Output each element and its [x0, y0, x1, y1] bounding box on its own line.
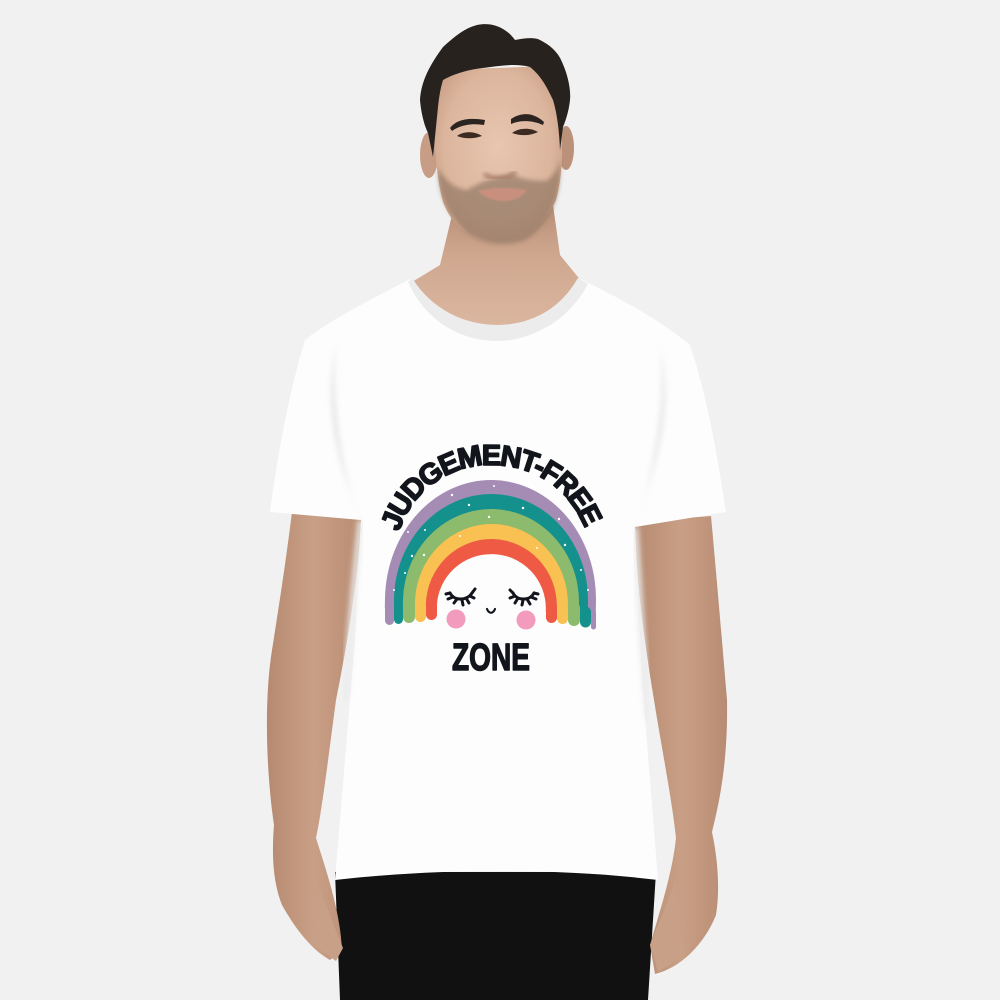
neck: [412, 205, 582, 330]
right ear: [558, 126, 574, 170]
red band: [426, 538, 558, 612]
face: [434, 66, 562, 244]
nose: [484, 172, 516, 178]
face on rainbow: [446, 589, 538, 630]
sparkle dots: [393, 485, 589, 591]
heading: zone: ZONE: [452, 637, 530, 679]
inner dome: [436, 553, 547, 633]
right cheek: [516, 610, 536, 630]
scalloped feet: [390, 606, 594, 627]
green band: [403, 507, 581, 612]
right closed eye: [510, 590, 538, 605]
trousers: [335, 872, 656, 1000]
eyebrows: [450, 114, 544, 131]
left ear: [420, 132, 438, 178]
purple band: [385, 478, 599, 612]
left closed eye: [446, 589, 475, 605]
collar: [408, 278, 588, 341]
mouth: [478, 188, 527, 201]
rainbow: [384, 478, 599, 634]
head: [420, 24, 574, 244]
yellow band: [415, 522, 570, 612]
t-shirt: [270, 278, 726, 880]
left arm and hand: [267, 512, 361, 961]
smile: [487, 609, 495, 613]
beard: [438, 160, 560, 244]
eyes: [457, 129, 538, 138]
right arm and hand: [635, 516, 727, 974]
curved heading: JUDGEMENT-FREE: [382, 444, 604, 530]
hair: [420, 24, 570, 157]
sleeve shading: [332, 345, 665, 525]
teal band: [394, 492, 590, 612]
left cheek: [446, 610, 466, 628]
